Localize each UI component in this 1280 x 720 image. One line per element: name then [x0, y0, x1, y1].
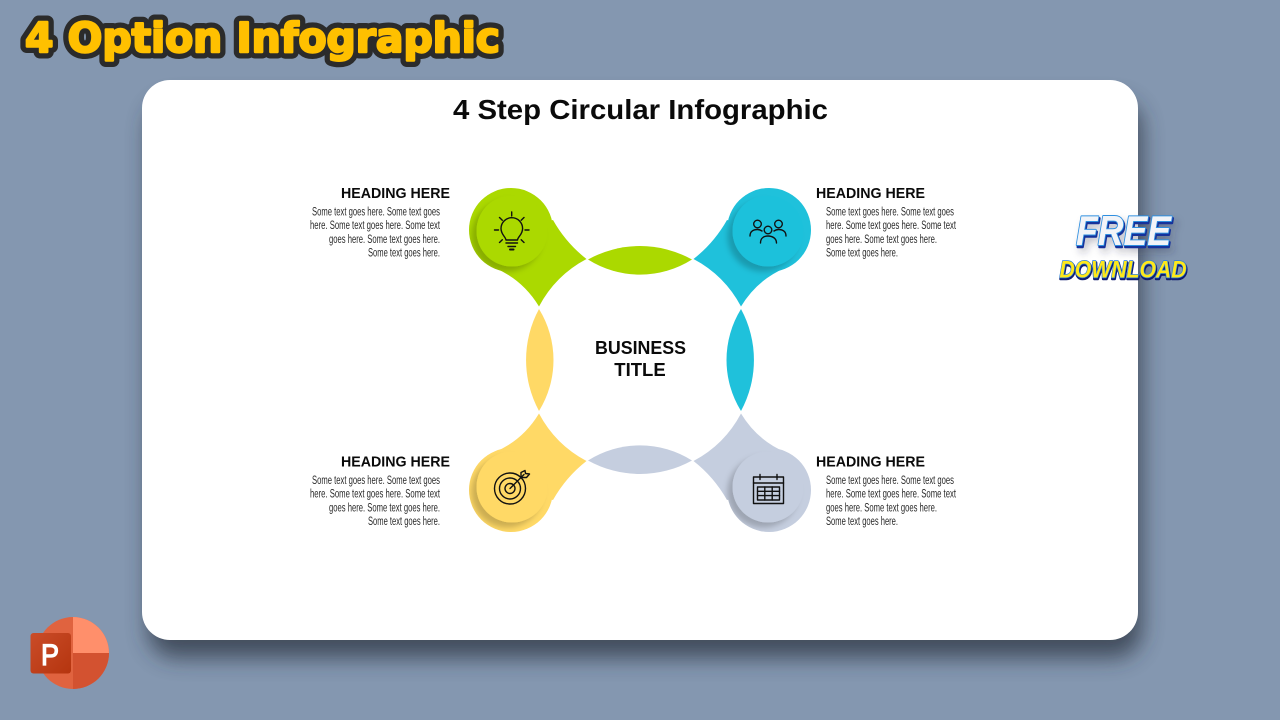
free download badge: DOWNLOAD — [1060, 256, 1186, 284]
main title: 4 Option Infographic — [25, 14, 500, 62]
petal: cyan — [694, 188, 811, 306]
text block: top right: goes here. Some text goes here. — [826, 234, 937, 246]
free download badge: FREE — [1077, 209, 1174, 256]
lens: right cyan — [727, 309, 754, 411]
icon: light bulb — [494, 212, 529, 250]
text block: bottom right: here. Some text goes here. Some text — [826, 488, 957, 500]
free download badge: FREE — [1076, 207, 1173, 254]
text block: top right: Some text goes here. Some text goes — [826, 206, 954, 218]
text block: top left: goes here. Some text goes here. — [329, 234, 440, 246]
petal: yellow — [469, 414, 586, 532]
text block: bottom left — [310, 454, 450, 528]
text block: bottom right: Some text goes here. — [826, 516, 898, 528]
text block: bottom left: goes here. Some text goes here. — [329, 502, 440, 514]
main title: 4 Option Infographic — [25, 14, 500, 62]
text block: bottom left: Some text goes here. Some text goes — [312, 475, 440, 487]
free download badge: DOWNLOAD — [1060, 258, 1187, 285]
petal: green — [469, 188, 586, 306]
text block: top right: here. Some text goes here. Some text — [826, 220, 957, 232]
text block: top right: HEADING HERE — [816, 185, 925, 202]
petal: grey — [694, 414, 811, 532]
card heading: 4 Step Circular Infographic — [453, 94, 828, 125]
text block: bottom left: Some text goes here. — [368, 516, 440, 528]
text block: bottom left: HEADING HERE — [341, 454, 450, 470]
text block: top right — [816, 185, 957, 260]
lens: bottom grey — [588, 445, 692, 474]
text block: top left — [310, 185, 450, 260]
center title: TITLE — [614, 359, 666, 380]
icon: calendar — [754, 474, 784, 504]
text block: top left: Some text goes here. — [368, 248, 440, 260]
text block: bottom right — [816, 454, 957, 528]
text block: bottom right: Some text goes here. Some text goes — [826, 475, 954, 487]
icon: PowerPoint logo — [30, 617, 109, 689]
text block: top left: HEADING HERE — [341, 185, 450, 202]
lens: top green — [588, 246, 692, 275]
icon: people — [750, 220, 786, 243]
text block: bottom left: here. Some text goes here. Some text — [310, 488, 441, 500]
text block: top left: Some text goes here. Some text goes — [312, 206, 440, 218]
text block: bottom right: goes here. Some text goes here. — [826, 502, 937, 514]
center title: BUSINESS — [595, 337, 686, 358]
white card panel — [142, 80, 1138, 640]
free download badge: DOWNLOAD — [1060, 256, 1186, 284]
text block: top left: here. Some text goes here. Some text — [310, 220, 441, 232]
free download badge — [1060, 207, 1187, 285]
lens: left yellow — [526, 309, 553, 411]
icon: target with arrow — [494, 470, 530, 504]
text block: top right: Some text goes here. — [826, 248, 898, 260]
free download badge: FREE — [1076, 207, 1173, 254]
card shadow — [148, 100, 1142, 658]
center title — [595, 337, 686, 380]
text block: bottom right: HEADING HERE — [816, 454, 925, 470]
icon: PowerPoint logo: P — [41, 639, 59, 672]
